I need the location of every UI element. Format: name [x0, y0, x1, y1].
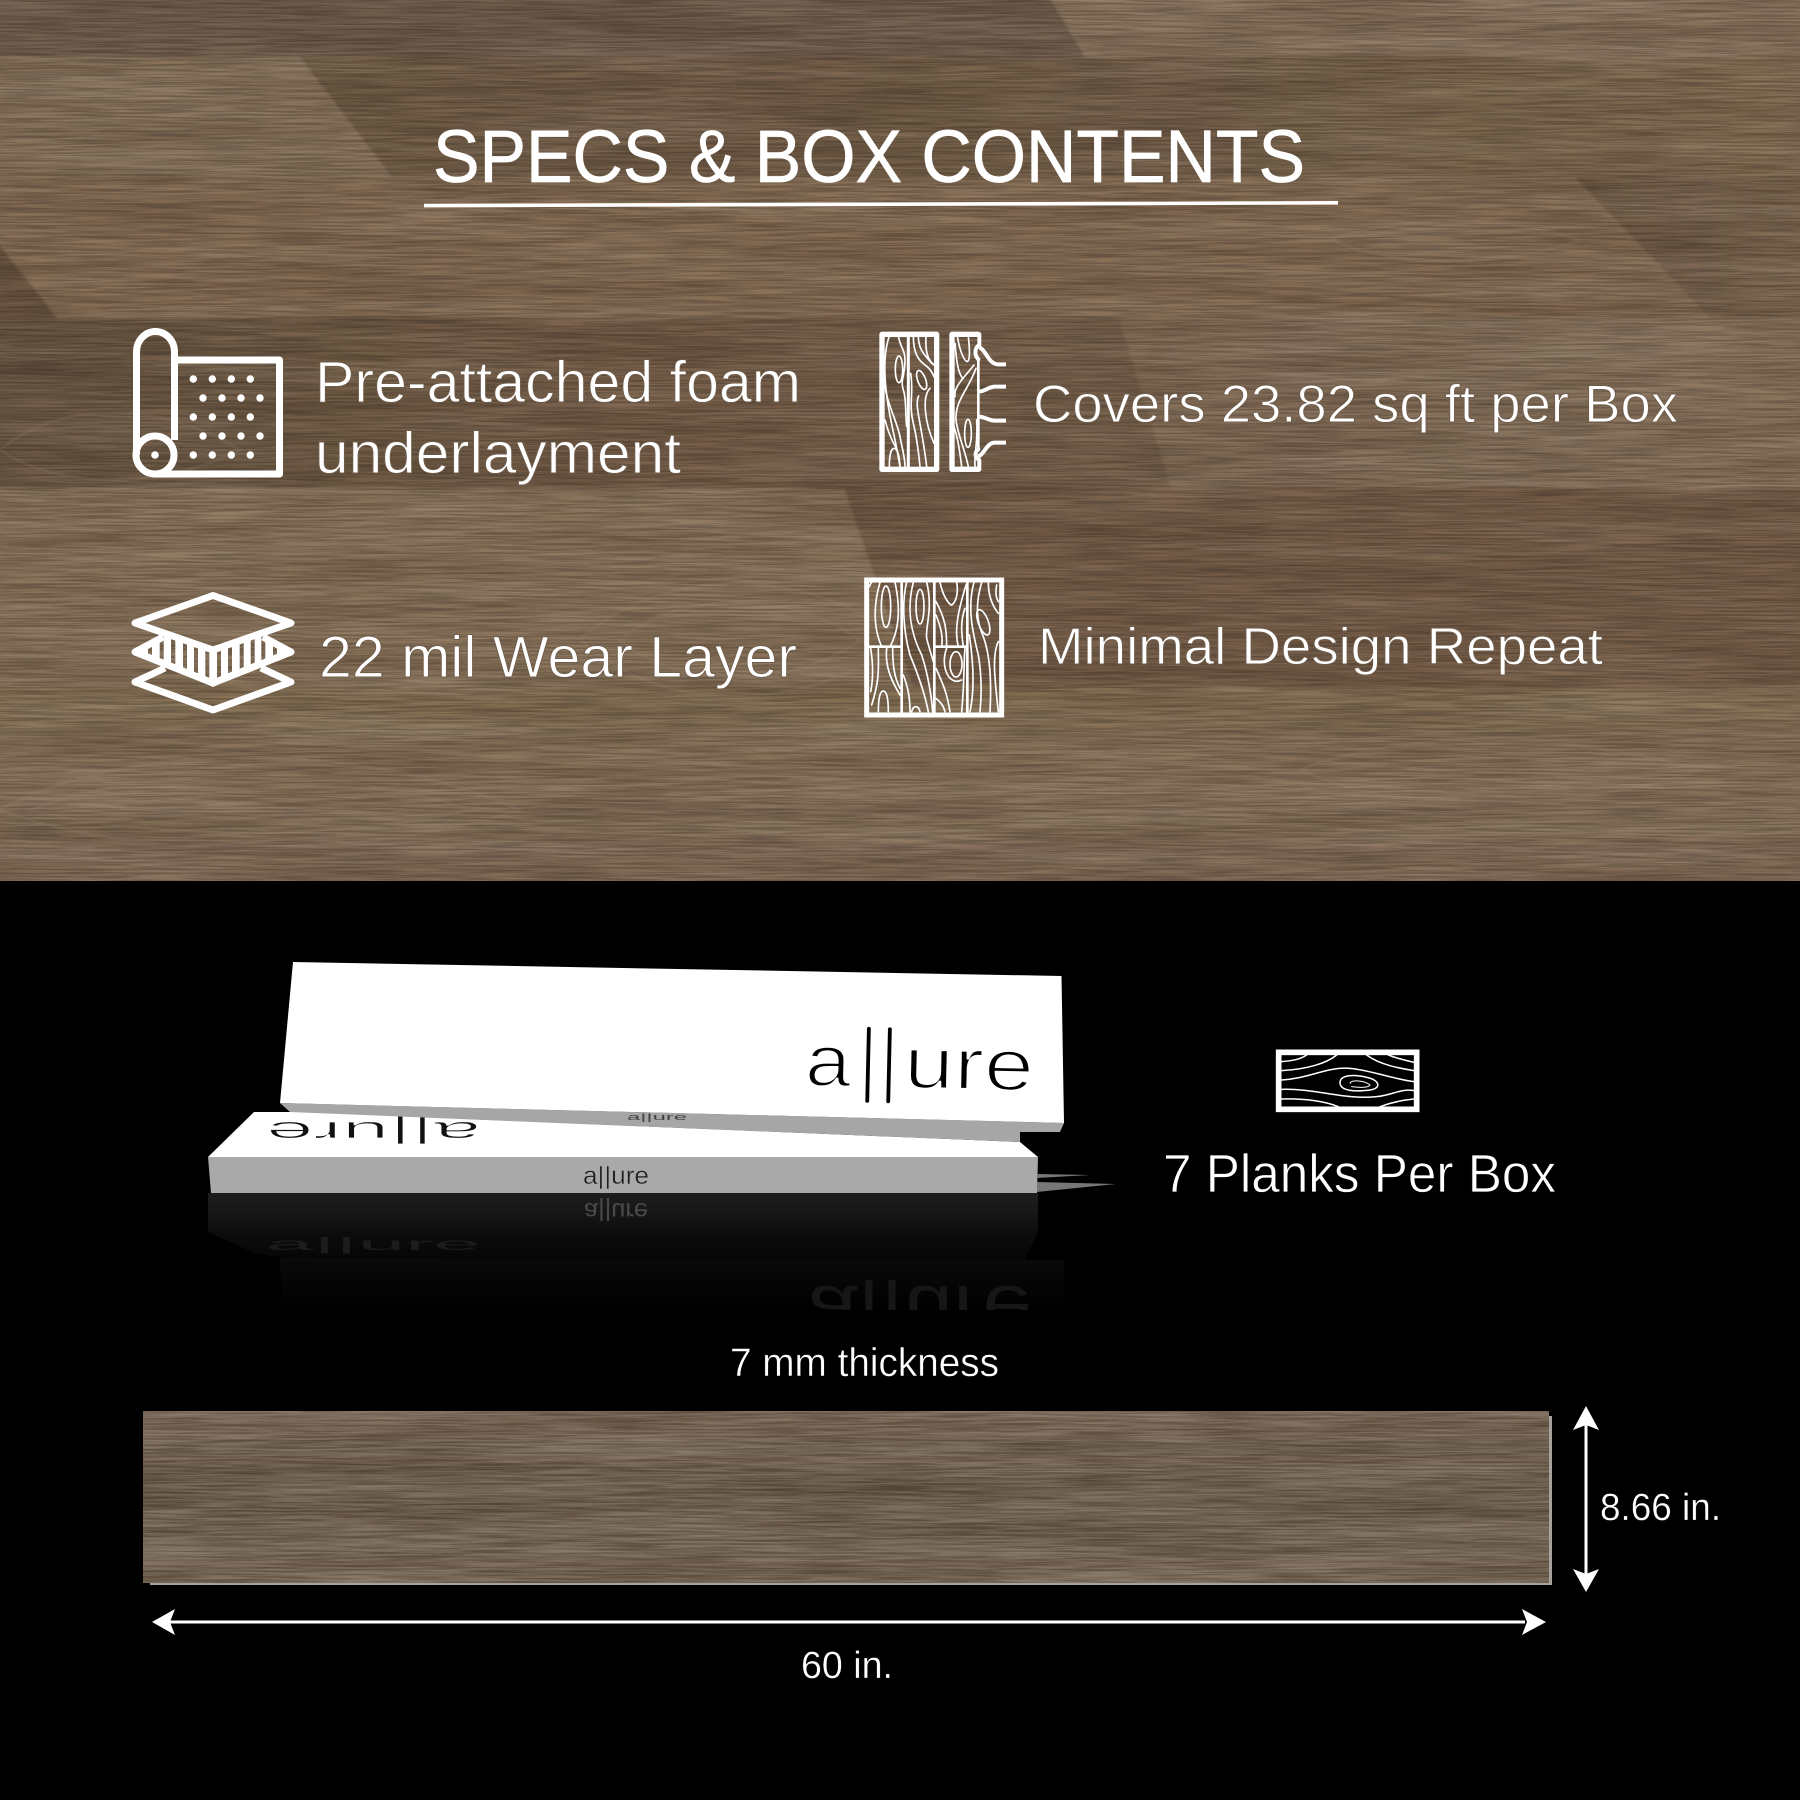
icon: wear layer stack — [131, 596, 295, 710]
text: planks per box: 7 Planks Per Box — [1163, 1144, 1556, 1204]
panel: wood background — [0, 0, 1800, 890]
text: pre-attached foam underlayment: Pre-attached foam — [315, 350, 801, 415]
upper box edge — [280, 1103, 1064, 1142]
large allure logo — [804, 1020, 1035, 1107]
text: 60 in.: 60 in. — [801, 1645, 893, 1687]
small logo on upper box edge: a||ure — [627, 1112, 688, 1122]
lower box top — [208, 1112, 1038, 1157]
plank image — [143, 1411, 1552, 1585]
upside-down logo on lower box: a||ure — [266, 1115, 481, 1149]
lower box front — [208, 1157, 1038, 1193]
text: 8.66 in.: 8.66 in. — [1600, 1487, 1721, 1529]
front logo: a||ure — [583, 1162, 649, 1190]
text: pre-attached foam underlayment — [315, 350, 801, 486]
text: covers per box: Covers 23.82 sq ft per Box — [1033, 375, 1678, 434]
panel: product boxes — [208, 962, 1116, 1310]
text: thickness: 7 mm thickness — [730, 1341, 999, 1385]
arrow: height — [1573, 1406, 1599, 1592]
large allure logo: a — [804, 1020, 852, 1102]
box shadow slivers — [1037, 1174, 1116, 1192]
icon: foam roll — [136, 331, 280, 474]
box reflection: a||ure — [808, 1270, 1032, 1350]
upper box face — [280, 962, 1064, 1123]
box reflection: a||ure — [584, 1197, 648, 1225]
heading: title: SPECS & BOX CONTENTS — [433, 115, 1305, 198]
text: pre-attached foam underlayment: underlayment — [315, 421, 681, 486]
icon: minimal design repeat — [867, 580, 1002, 715]
text: minimal design repeat: Minimal Design Repeat — [1038, 618, 1604, 676]
large allure logo: ure — [903, 1023, 1035, 1107]
box reflection: a||ure — [266, 1234, 481, 1254]
arrow: width — [152, 1609, 1546, 1635]
text: wear layer: 22 mil Wear Layer — [319, 625, 797, 690]
icon: single plank — [1279, 1052, 1417, 1109]
box reflection — [208, 1193, 1064, 1310]
icon: click-lock planks — [882, 334, 1006, 469]
